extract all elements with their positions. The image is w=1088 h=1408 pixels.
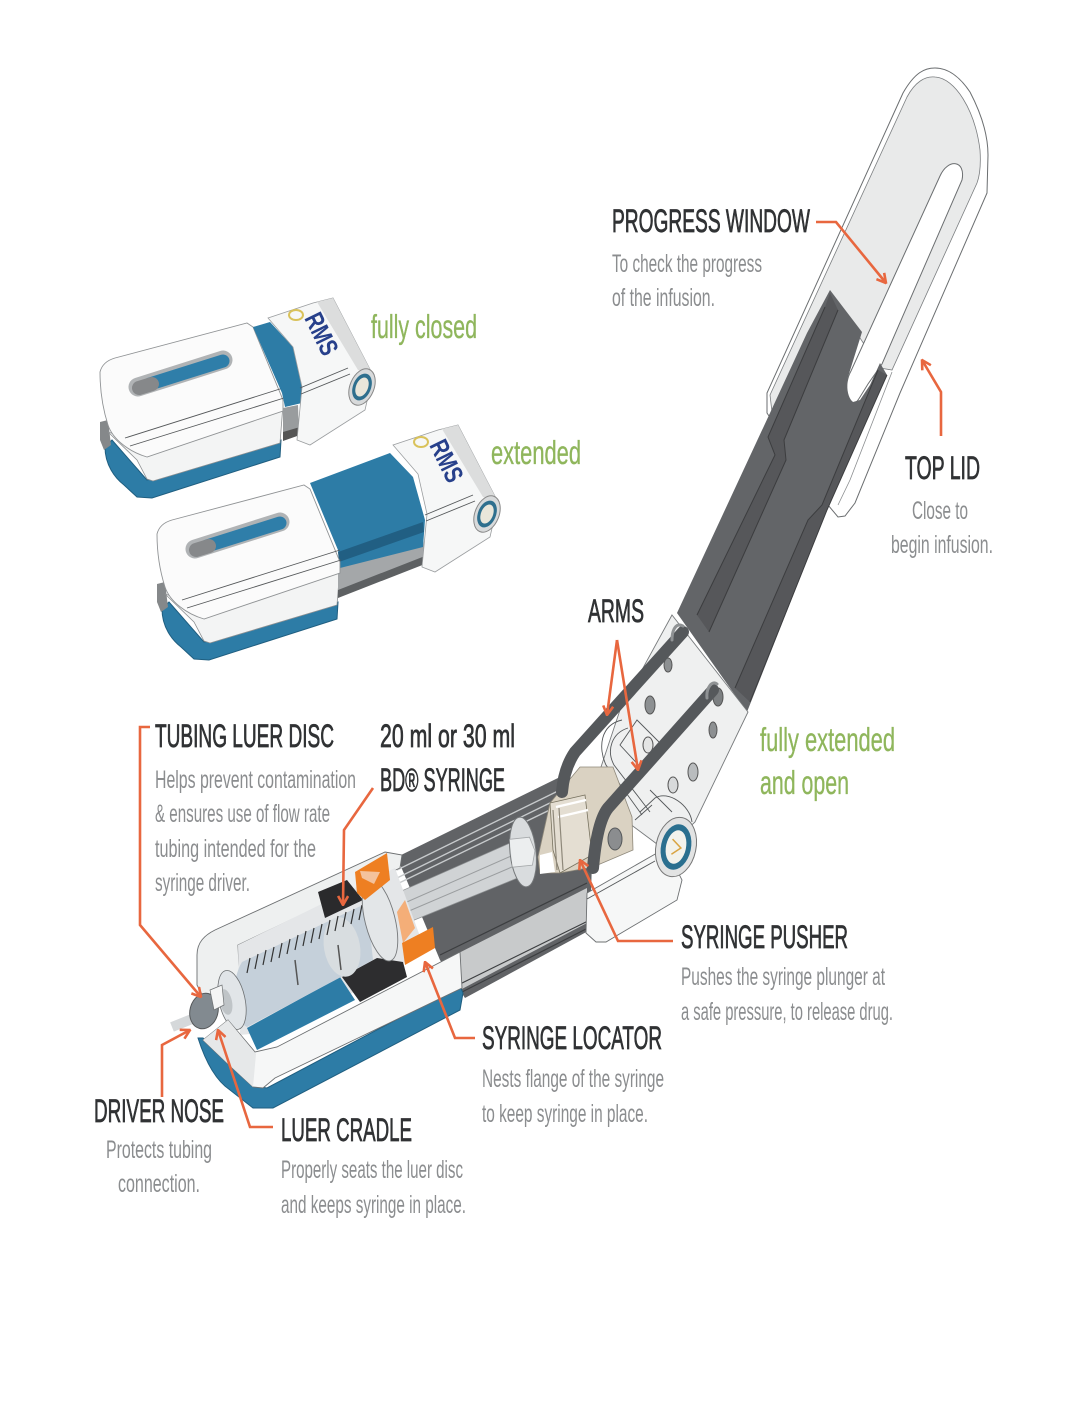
beige syringe pusher xyxy=(538,767,633,874)
bottom blue shell xyxy=(162,602,338,660)
callout: luer cradle: and keeps syringe in place. xyxy=(281,1191,466,1219)
callout: progress window: of the infusion. xyxy=(612,284,715,312)
lower white body xyxy=(165,567,340,643)
lower white body xyxy=(108,405,283,481)
callout: progress window: PROGRESS WINDOW xyxy=(612,203,810,239)
bottom blue shell xyxy=(105,440,281,498)
callout: driver nose: connection. xyxy=(118,1170,200,1198)
state label: fully extended and open xyxy=(760,721,895,801)
white hinge housing xyxy=(586,853,682,942)
RMS logo: RMS xyxy=(424,434,470,487)
state label: fully extended and open: and open xyxy=(760,764,849,801)
blue floor under barrel xyxy=(247,977,355,1050)
syringe flange xyxy=(355,876,405,964)
callout: syringe pusher: SYRINGE PUSHER xyxy=(681,919,848,955)
arrow: driver nose xyxy=(162,1030,190,1097)
state label: fully closed: fully closed xyxy=(371,308,477,345)
callout: arms: ARMS xyxy=(588,593,644,629)
RMS logo: RMS xyxy=(299,307,345,360)
arms xyxy=(562,625,717,868)
callout: syringe locator: SYRINGE LOCATOR xyxy=(482,1020,662,1056)
arrow: syringe xyxy=(343,788,373,905)
callout: syringe: BD® SYRINGE xyxy=(380,762,505,798)
callout: syringe locator: to keep syringe in place. xyxy=(482,1100,648,1128)
side clip xyxy=(157,582,168,612)
device: fully extended and open xyxy=(172,68,988,1108)
callout: progress window xyxy=(612,203,810,312)
progress window slot xyxy=(847,164,963,403)
gray carriage xyxy=(338,533,425,597)
callout: tubing luer disc: & ensures use of flow rate xyxy=(155,800,330,828)
callout: top lid xyxy=(891,450,993,559)
arrow: syringe pusher xyxy=(580,860,673,941)
blue band xyxy=(253,322,302,407)
arrow: progress window xyxy=(816,222,886,283)
callout: tubing luer disc: syringe driver. xyxy=(155,869,250,897)
callout: driver nose: DRIVER NOSE xyxy=(94,1093,224,1129)
callout: syringe locator: Nests flange of the syringe xyxy=(482,1065,664,1093)
syringe locator: orange parts xyxy=(355,853,435,965)
callout: syringe: 20 ml or 30 ml xyxy=(380,718,515,754)
callout: driver nose: Protects tubing xyxy=(106,1136,212,1164)
callout: driver nose xyxy=(94,1093,224,1198)
callout: luer cradle: Properly seats the luer disc xyxy=(281,1156,463,1184)
plunger disc xyxy=(506,816,540,888)
metal arm plate xyxy=(600,615,748,850)
progress slot xyxy=(195,522,280,549)
rails in tray xyxy=(397,777,592,998)
callout: syringe pusher xyxy=(681,919,893,1026)
side clip xyxy=(100,420,111,450)
top lid with progress window xyxy=(767,68,988,517)
arrow: top lid xyxy=(922,360,941,436)
callout: top lid: TOP LID xyxy=(905,450,980,486)
dark lid panel xyxy=(677,290,887,712)
front tray: white wall xyxy=(203,952,462,1088)
callout: syringe locator xyxy=(482,1020,664,1128)
callout: top lid: Close to xyxy=(912,497,968,525)
arrow: tubing luer disc xyxy=(140,727,201,997)
callout: syringe xyxy=(380,718,515,798)
device: extended xyxy=(157,425,505,660)
callout: tubing luer disc: Helps prevent contamination xyxy=(155,766,356,794)
gray under band xyxy=(283,405,299,437)
top lid xyxy=(157,485,340,619)
callout: top lid: begin infusion. xyxy=(891,531,993,559)
progress slot xyxy=(138,360,223,387)
arrow: arms right xyxy=(617,640,638,770)
callout: tubing luer disc: tubing intended for the xyxy=(155,835,316,863)
logo ring xyxy=(289,310,303,320)
lower black block xyxy=(342,958,407,1002)
arrow: arms left xyxy=(607,640,617,715)
syringe barrel xyxy=(213,903,373,1032)
arrow: luer cradle xyxy=(218,1030,273,1127)
callout: progress window: To check the progress xyxy=(612,250,762,278)
hinge disc xyxy=(650,813,702,881)
luer disc and driver nose xyxy=(172,985,224,1032)
callout arrows xyxy=(140,222,941,1127)
front tray: blue shell xyxy=(198,986,463,1108)
state label: fully extended and open: fully extended xyxy=(760,721,895,758)
hinge disc xyxy=(469,492,505,536)
head xyxy=(393,425,498,572)
callout: syringe pusher: a safe pressure, to release drug. xyxy=(681,998,893,1026)
device: fully closed xyxy=(100,298,380,498)
head xyxy=(268,298,373,445)
callout: tubing luer disc xyxy=(155,718,356,897)
callout: luer cradle: LUER CRADLE xyxy=(281,1112,412,1148)
upper black block xyxy=(318,880,363,918)
logo ring xyxy=(414,437,428,447)
callout: syringe pusher: Pushes the syringe plunger at xyxy=(681,963,885,991)
interior background xyxy=(238,868,425,1035)
callout: luer cradle xyxy=(281,1112,466,1219)
top lid xyxy=(100,323,283,457)
back wall of lower shell xyxy=(197,852,402,1000)
blue extended sleeve xyxy=(310,453,425,568)
state label: extended: extended xyxy=(491,434,581,471)
arrow: syringe locator xyxy=(425,962,475,1038)
callout: tubing luer disc: TUBING LUER DISC xyxy=(155,718,334,754)
hinge disc xyxy=(344,365,380,409)
